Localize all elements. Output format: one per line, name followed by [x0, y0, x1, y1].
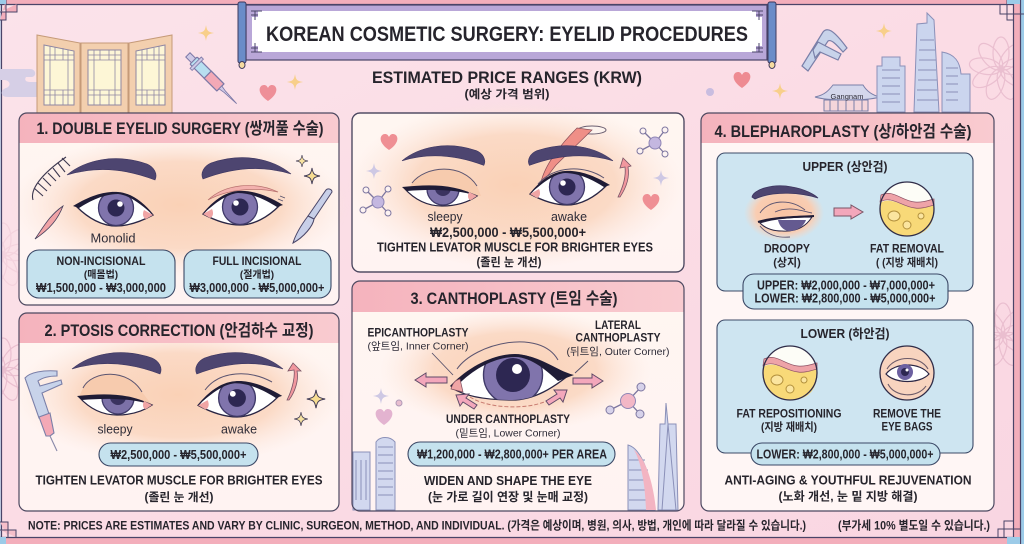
- caption: ANTI-AGING & YOUTHFUL REJUVENATION: [724, 472, 972, 488]
- eye: sleepy: [402, 146, 485, 206]
- labels: sleepy: [428, 210, 463, 224]
- header 4: [701, 113, 994, 143]
- header 3: [352, 281, 684, 312]
- pill: full incisional: (절개법): [240, 268, 274, 281]
- box: upper: [717, 153, 973, 291]
- labels: ( (지방 재배치): [876, 255, 938, 269]
- header 2: 2. PTOSIS CORRECTION (안검하수 교정): [44, 321, 314, 340]
- icon: syringe: [182, 49, 242, 109]
- arrows: direction of corners: [415, 373, 603, 409]
- labels: (상지): [773, 256, 801, 269]
- eye: large canthoplasty: [450, 342, 574, 407]
- box: lower: [717, 320, 973, 453]
- icon: folding screen: [37, 35, 172, 114]
- icons: decorative sparkles and hearts: [198, 23, 892, 101]
- label: epicanthoplasty: EPICANTHOPLASTY: [368, 326, 468, 340]
- pill: non-incisional: [27, 250, 175, 298]
- icon: droopy eye: [744, 185, 824, 241]
- caption: (졸린 눈 개선): [144, 491, 214, 504]
- caption: TIGHTEN LEVATOR MUSCLE FOR BRIGHTER EYES: [36, 472, 323, 488]
- labels: [377, 210, 653, 269]
- label: under canthoplasty: [446, 412, 570, 440]
- icon: caliper syringe: [25, 371, 62, 451]
- panel: 1 double eyelid surgery: [10, 113, 350, 305]
- labels: (졸린 눈 개선): [476, 256, 542, 269]
- labels: (지방 재배치): [761, 420, 817, 434]
- arrow: [834, 205, 863, 219]
- decorative flowers: [0, 37, 1024, 403]
- label: epicanthoplasty: [368, 326, 468, 352]
- icon: incision: [35, 206, 63, 239]
- label: lateral canthoplasty: [566, 318, 670, 358]
- label: epicanthoplasty: (앞트임, Inner Corner): [368, 340, 468, 352]
- eye: awake: awake: [221, 422, 257, 436]
- pill: full incisional: [184, 250, 331, 298]
- header 1: 1. DOUBLE EYELID SURGERY (쌍꺼풀 수술): [36, 119, 324, 138]
- icon: levator muscle: [541, 126, 606, 182]
- subtitle: ESTIMATED PRICE RANGES (KRW): [372, 68, 642, 87]
- panel: 3 canthoplasty: [352, 281, 684, 511]
- icons: sparkles: [296, 155, 320, 184]
- eye: monolid: [67, 159, 156, 246]
- icon: Gangnam pavilion: Gangnam: [831, 92, 863, 101]
- header 1: [19, 113, 339, 143]
- label: lateral canthoplasty: CANTHOPLASTY: [576, 330, 660, 344]
- title banner: [238, 2, 776, 68]
- header 4: 4. BLEPHAROPLASTY (상/하안검 수술): [714, 122, 972, 141]
- header 2: [19, 313, 339, 343]
- eye: awake: [196, 353, 283, 436]
- icon: caliper top right: [802, 30, 847, 71]
- eye: double eyelid: [202, 158, 291, 225]
- label: lateral canthoplasty: LATERAL: [595, 318, 641, 332]
- panel: 4 blepharoplasty: [701, 113, 994, 511]
- pill: upper and lower prices: LOWER: ₩2,800,000 - ₩5,000,000+: [754, 292, 936, 306]
- pill: non-incisional: ₩1,500,000 - ₩3,000,000: [36, 281, 166, 295]
- labels: [736, 406, 941, 434]
- caption: WIDEN AND SHAPE THE EYE: [424, 473, 592, 488]
- labels: FAT REMOVAL: [870, 242, 944, 256]
- pill: full incisional: FULL INCISIONAL: [212, 256, 302, 268]
- pill: price: ₩1,200,000 - ₩2,800,000+ PER AREA: [417, 448, 607, 462]
- title text: KOREAN COSMETIC SURGERY: EYELID PROCEDURES: [266, 23, 748, 46]
- labels: [764, 242, 944, 269]
- pill: price: ₩2,500,000 - ₩5,500,000+: [110, 448, 246, 462]
- caption: [724, 472, 972, 504]
- icon: fat removal: [879, 182, 934, 236]
- icon: skyline: [877, 13, 970, 112]
- pill: full incisional: ₩3,000,000 - ₩5,000,000+: [190, 281, 324, 295]
- icon: Gangnam pavilion: [815, 85, 880, 111]
- footnote: NOTE: PRICES ARE ESTIMATES AND VARY BY CLINIC, SURGEON, METHOD, AND INDIVIDUAL. (가격은 예상이며, 병원, 의사, 방법, 개인에 따라 달라질 수 있습니다.): [28, 518, 806, 532]
- caption: [424, 473, 592, 504]
- panel: 2 ptosis correction: [13, 313, 343, 511]
- icon: scalpel: [293, 189, 332, 243]
- subtitle Korean: (예상 가격 범위): [464, 87, 550, 101]
- header 3: 3. CANTHOPLASTY (트임 수술): [410, 289, 618, 308]
- panel: middle top tighten levator: [347, 101, 684, 272]
- box: lower: LOWER (하안검): [800, 327, 890, 341]
- VAT note: (부가세 10% 별도일 수 있습니다.): [838, 518, 990, 532]
- icon: molecule: [606, 383, 645, 418]
- label: under canthoplasty: (밑트임, Lower Corner): [456, 426, 560, 440]
- pill: price: [408, 442, 615, 466]
- icons: buildings: [353, 403, 678, 510]
- eye: sleepy: sleepy: [98, 422, 133, 436]
- arrow up: [618, 158, 631, 197]
- eye: monolid: Monolid: [90, 232, 136, 246]
- eye: awake: [528, 146, 613, 205]
- icons: sparkles: [294, 390, 325, 426]
- pill: lower price: LOWER: ₩2,800,000 - ₩5,000,000+: [756, 448, 934, 462]
- eye: sleepy: [72, 353, 161, 436]
- pill: non-incisional: (매몰법): [84, 268, 118, 281]
- pill: upper and lower prices: UPPER: ₩2,000,000 - ₩7,000,000+: [757, 278, 935, 292]
- labels: EYE BAGS: [882, 420, 932, 434]
- label: lateral canthoplasty: (뒤트임, Outer Corner): [566, 345, 670, 358]
- icon: eye bags: [880, 346, 934, 400]
- pill: upper and lower prices: [743, 274, 948, 309]
- caption: [36, 472, 323, 504]
- caption: (눈 가로 길이 연장 및 눈매 교정): [428, 489, 588, 504]
- icons: heart and sparkle: [373, 388, 402, 425]
- subtitle: [372, 68, 642, 101]
- icon: stitches: [32, 157, 70, 200]
- labels: DROOPY: [764, 242, 810, 256]
- labels: ₩2,500,000 - ₩5,500,000+: [430, 225, 586, 240]
- labels: awake: [551, 210, 587, 224]
- pill: lower price: [751, 443, 940, 465]
- pill: price: [99, 443, 258, 466]
- arrow up: [287, 363, 301, 400]
- icons: hearts, molecules and sparkles: [360, 127, 669, 216]
- caption: (노화 개선, 눈 밑 지방 해결): [778, 488, 918, 504]
- label: under canthoplasty: UNDER CANTHOPLASTY: [446, 412, 570, 426]
- labels: FAT REPOSITIONING: [736, 406, 842, 420]
- pill: non-incisional: NON-INCISIONAL: [56, 256, 146, 268]
- labels: TIGHTEN LEVATOR MUSCLE FOR BRIGHTER EYES: [377, 240, 653, 254]
- icon: cloud: [0, 69, 37, 97]
- labels: REMOVE THE: [873, 406, 941, 420]
- icon: fat repositioning: [762, 346, 817, 400]
- box: upper: UPPER (상안검): [802, 160, 888, 174]
